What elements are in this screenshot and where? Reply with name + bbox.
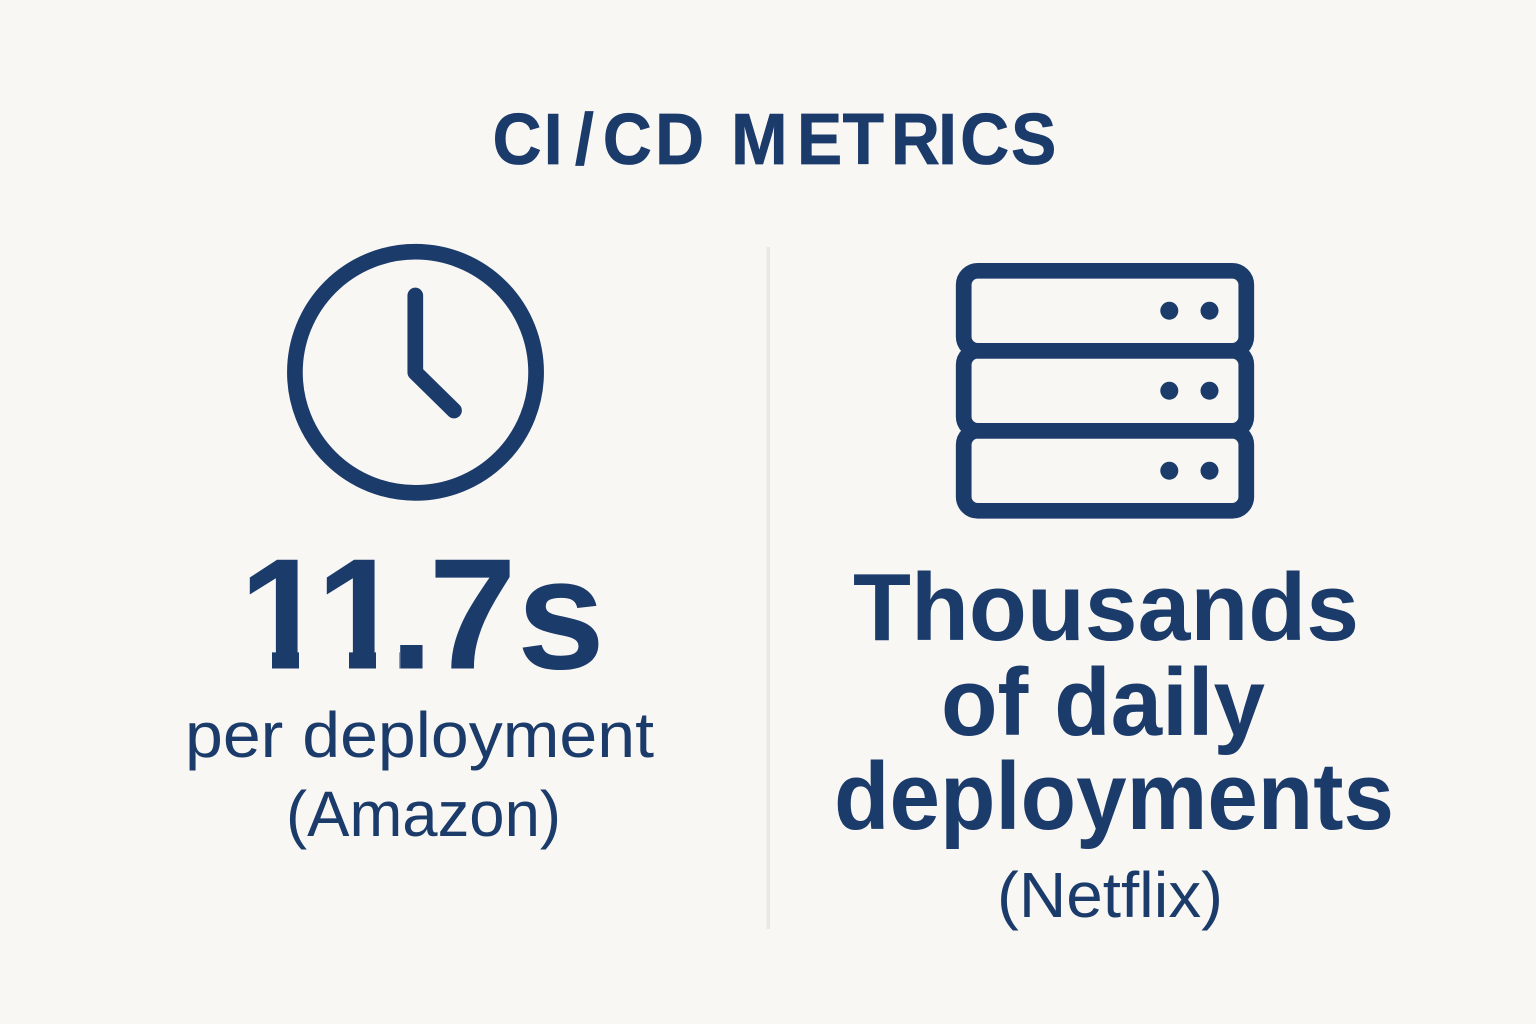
icon: server stack xyxy=(964,271,1246,511)
title: CI/CD METRICS xyxy=(493,99,1056,179)
headline: Thousands of daily deployments: deployments xyxy=(834,743,1394,850)
panel: Netflix metric xyxy=(834,271,1394,931)
headline: Thousands of daily deployments: of daily xyxy=(941,649,1265,756)
big number: 11.7s: 11.7s xyxy=(239,526,605,702)
label: per deployment: per deployment xyxy=(185,699,654,771)
icon: clock xyxy=(295,252,536,493)
label: Amazon: (Amazon) xyxy=(286,778,561,850)
panel: Amazon metric xyxy=(185,252,654,850)
headline: Thousands of daily deployments: Thousands xyxy=(853,554,1359,661)
headline: Thousands of daily deployments xyxy=(834,554,1394,850)
divider between panels xyxy=(766,247,770,929)
label: Netflix: (Netflix) xyxy=(997,859,1223,931)
